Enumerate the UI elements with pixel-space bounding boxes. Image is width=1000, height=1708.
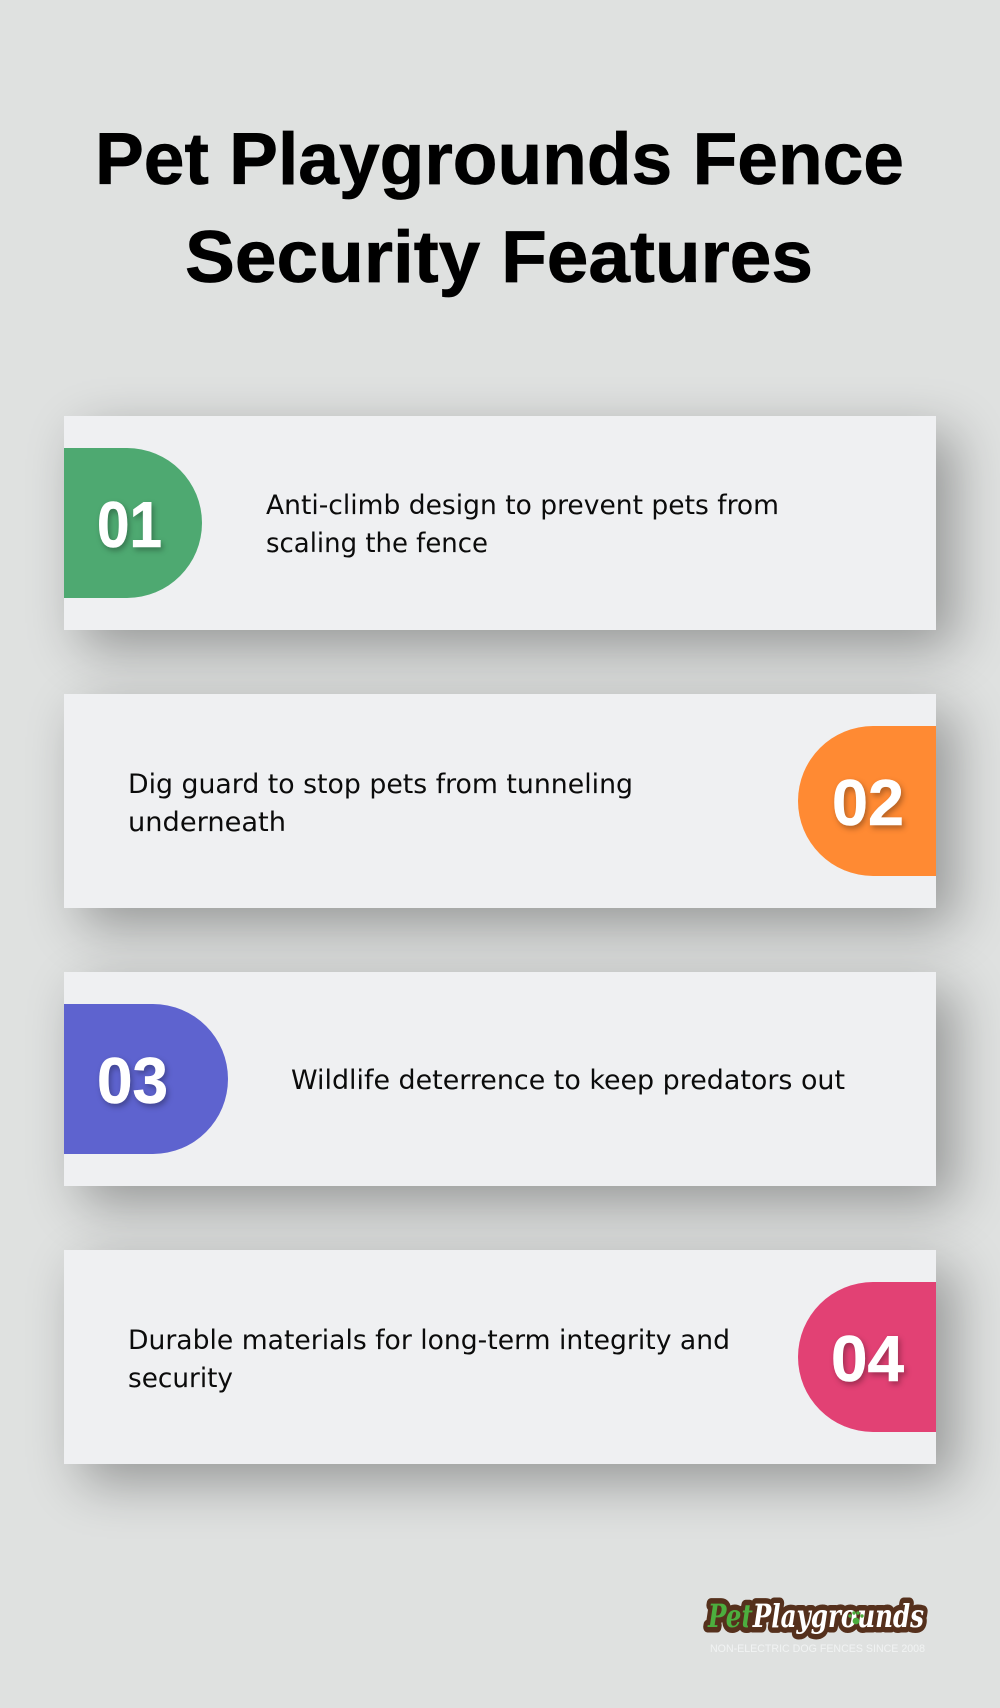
text: anti-climb design: scaling the fence [266, 528, 488, 559]
text: durable materials [128, 1325, 730, 1394]
text: durable materials: security [128, 1363, 233, 1394]
panel: feature 01 [64, 416, 936, 630]
text: dig guard: underneath [128, 807, 286, 838]
badge: 04 [798, 1282, 936, 1432]
badge: 01 [64, 448, 202, 598]
text: durable materials: Durable materials for long-term integrity and [128, 1325, 730, 1356]
title: Pet Playgrounds Fence [95, 119, 904, 200]
panel: feature 04 [64, 1250, 936, 1464]
panel: feature 03 [64, 972, 936, 1186]
title [95, 119, 904, 298]
logo: Pet Playgrounds: NON-ELECTRIC DOG FENCES SINCE 2008 [710, 1643, 925, 1655]
panel: feature 02 [64, 694, 936, 908]
number 04: 04 [831, 1322, 904, 1395]
text: wildlife deterrence: Wildlife deterrence to keep predators out [291, 1065, 845, 1096]
badge: 02 [798, 726, 936, 876]
text: dig guard: Dig guard to stop pets from tunneling [128, 769, 633, 800]
logo: Pet Playgrounds: PetPlaygrounds [707, 1597, 924, 1635]
text: anti-climb design [266, 490, 779, 559]
number 01: 01 [97, 488, 162, 561]
title: Security Features [185, 217, 813, 298]
text: anti-climb design: Anti-climb design to prevent pets from [266, 490, 779, 521]
number 02: 02 [832, 766, 904, 839]
number 03: 03 [97, 1044, 168, 1117]
text: dig guard [128, 769, 633, 838]
badge: 03 [64, 1004, 228, 1154]
